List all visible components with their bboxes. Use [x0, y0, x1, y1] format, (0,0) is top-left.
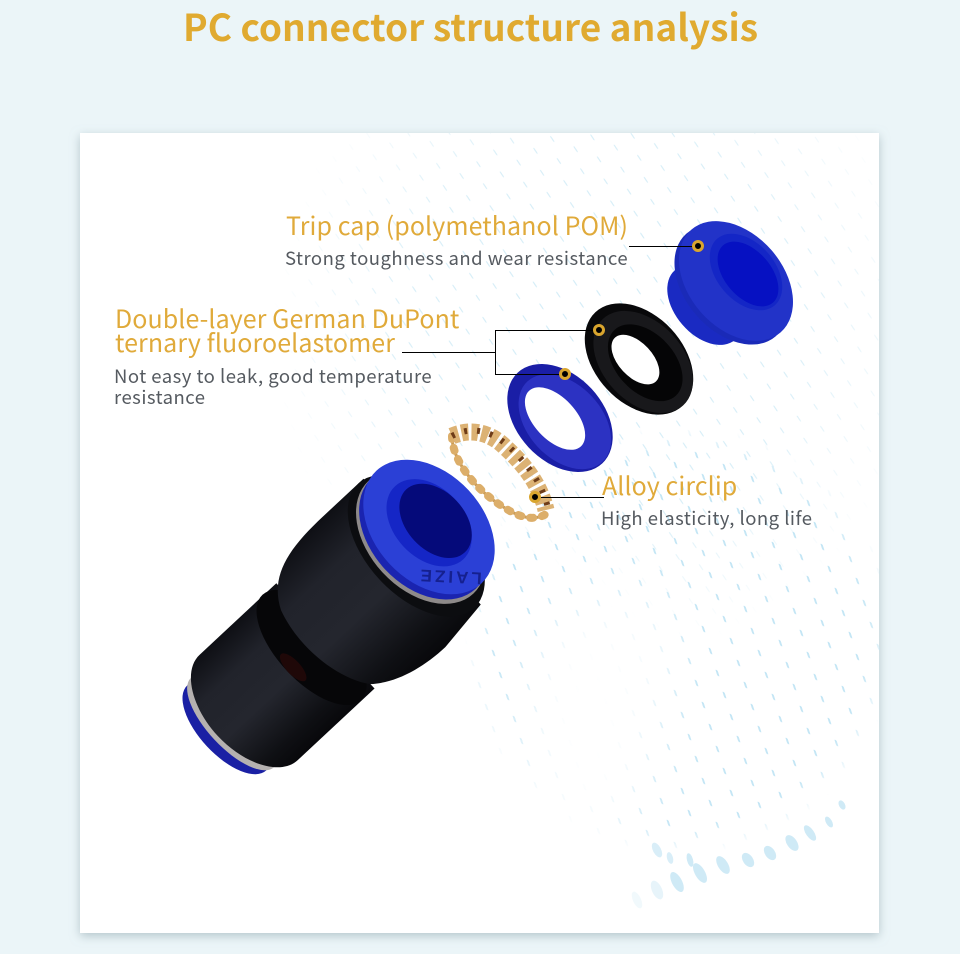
label: circlip: Alloy circlip — [602, 467, 737, 503]
hole — [695, 220, 797, 324]
lower band core — [452, 436, 546, 518]
far end silver ring — [173, 661, 292, 784]
callout: circlip leader — [530, 492, 604, 502]
cap hole — [369, 462, 489, 583]
label: fluoroelastomer: Not easy to leak, good temperature — [114, 363, 432, 389]
label: circlip — [601, 467, 813, 531]
label: trip cap: Strong toughness and wear resistance — [285, 245, 628, 271]
halftone dot pattern: bottom cluster — [630, 799, 847, 910]
callout: trip cap leader — [629, 242, 702, 250]
label: trip cap — [285, 207, 628, 271]
circlip — [452, 430, 548, 518]
neck shadow — [238, 572, 386, 723]
label: fluoroelastomer: Double-layer German DuPont — [115, 300, 460, 336]
blue cap rim — [333, 441, 514, 625]
halftone dot pattern: lower right — [471, 430, 880, 848]
blue cap face — [337, 434, 521, 620]
label: trip cap: Trip cap (polymethanol POM) — [286, 207, 628, 243]
tooth shadows — [452, 430, 548, 508]
flange back — [652, 204, 810, 366]
second body — [169, 583, 375, 789]
main body — [249, 479, 486, 716]
callout: fluoroelastomer bracket — [402, 326, 604, 378]
label: fluoroelastomer: ternary fluoroelastomer — [115, 324, 395, 360]
upper toothed band — [452, 432, 546, 510]
far end blue cap — [167, 667, 286, 789]
lower scalloped band — [452, 436, 546, 518]
neck — [652, 251, 758, 359]
silver ring — [330, 446, 511, 629]
flange face — [656, 199, 816, 363]
trip cap — [652, 199, 816, 366]
cap marking LAIZE: LAIZE — [417, 565, 482, 588]
red reflection — [276, 649, 311, 685]
label: circlip: High elasticity, long life — [601, 505, 813, 531]
blue seal ring — [486, 343, 634, 493]
halftone dot pattern: upper field — [305, 133, 879, 604]
black collar — [322, 449, 511, 642]
panel: white card — [80, 133, 879, 933]
label: fluoroelastomer: resistance — [114, 384, 206, 410]
connector body — [146, 432, 536, 812]
label: fluoroelastomer — [114, 300, 460, 410]
black fluoroelastomer ring — [563, 282, 715, 436]
